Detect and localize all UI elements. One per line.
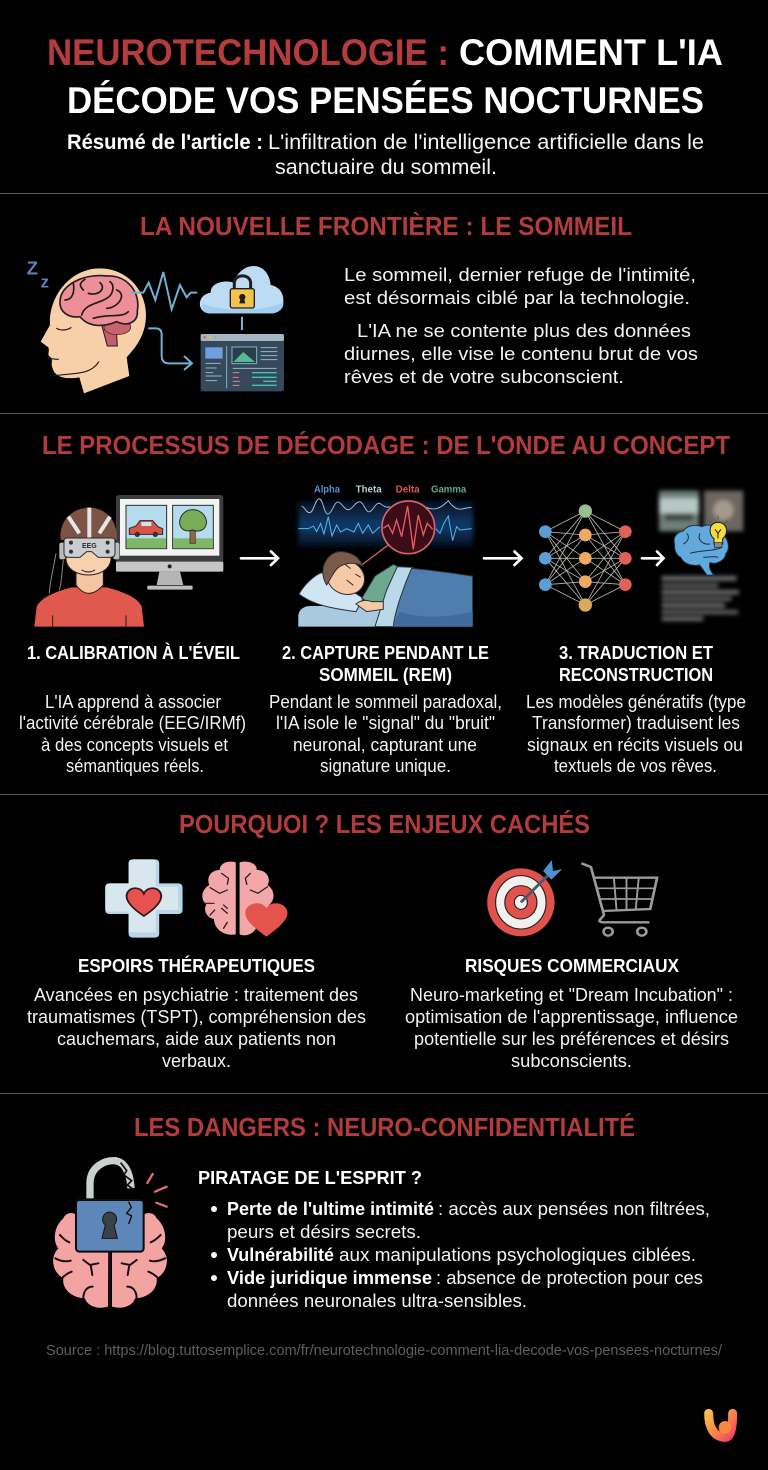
step 1: calibration xyxy=(19,642,246,776)
illustration: EEG calibration with monitor xyxy=(34,495,223,627)
step 1: calibration: sémantiques réels. xyxy=(66,756,204,776)
step 1: calibration: 1. CALIBRATION À L'ÉVEIL xyxy=(27,642,240,663)
arrow: step 1 to step 2 xyxy=(241,552,278,565)
illustration: reconstructed images, brain idea and blurred text xyxy=(659,491,743,621)
illustration: sleeper with brain wave capture: Alpha xyxy=(314,485,341,496)
source line: Source : https://blog.tuttosemplice.com/fr/neurotechnologie-comment-lia-decode-vos-pensees-nocturnes/ xyxy=(46,1343,723,1359)
step 2: capture during REM sleep: 2. CAPTURE PENDANT LE xyxy=(282,642,489,663)
icon: brain with cracked padlock xyxy=(53,1161,167,1308)
text: sleep as last refuge xyxy=(344,264,698,387)
text: sleep as last refuge: rêves et de votre subconscient. xyxy=(344,366,624,387)
step 1: calibration: à des concepts visuels et xyxy=(41,735,228,755)
panel: new frontier xyxy=(27,211,698,393)
bullet: legal void: Vide juridique immense xyxy=(227,1267,432,1288)
bullet: loss of ultimate intimacy: peurs et désirs secrets. xyxy=(227,1222,421,1242)
bullet: loss of ultimate intimacy: Perte de l'ultime intimité xyxy=(227,1198,434,1219)
icon: medical cross with heart xyxy=(105,859,183,938)
text: hacking the mind: PIRATAGE DE L'ESPRIT ? xyxy=(198,1167,422,1188)
step 3: translation and reconstruction: signaux en récits visuels ou xyxy=(527,735,743,755)
block: commercial risks: subconscients. xyxy=(511,1051,632,1071)
icon: target with arrow xyxy=(487,860,562,936)
step 2: capture during REM sleep: SOMMEIL (REM) xyxy=(319,664,452,685)
illustration: sleeping head, brain waves, cloud and data dashboard: z xyxy=(41,272,49,291)
block: therapeutic hopes xyxy=(27,955,366,1071)
step 3: translation and reconstruction: 3. TRADUCTION ET xyxy=(559,642,714,663)
icon: shopping cart xyxy=(581,863,657,936)
step 3: translation and reconstruction: textuels de vos rêves. xyxy=(554,756,717,776)
title: NEUROTECHNOLOGIE : xyxy=(47,32,449,73)
arrow: network to reconstruction xyxy=(642,552,664,565)
article summary: sanctuaire du sommeil. xyxy=(275,156,497,179)
illustration: sleeping head, brain waves, cloud and data dashboard: Z xyxy=(27,257,38,278)
step 3: translation and reconstruction: Les modèles génératifs (type xyxy=(526,692,746,712)
title: DÉCODE VOS PENSÉES NOCTURNES xyxy=(67,80,704,121)
bullet: loss of ultimate intimacy: : accès aux pensées non filtrées, xyxy=(438,1199,710,1219)
heading: decoding process: LE PROCESSUS DE DÉCODAGE : DE L'ONDE AU CONCEPT xyxy=(42,430,730,460)
title: COMMENT L'IA xyxy=(459,32,723,73)
illustration: sleeping head, brain waves, cloud and data dashboard xyxy=(27,257,284,393)
text: sleep as last refuge: est désormais ciblé par la technologie. xyxy=(344,287,690,308)
illustration: EEG calibration with monitor: EEG xyxy=(82,543,97,550)
panel: dangers xyxy=(53,1112,710,1311)
illustration: sleeper with brain wave capture: Gamma xyxy=(431,485,467,496)
bullet: legal void: données neuronales ultra-sensibles. xyxy=(227,1291,527,1311)
text: sleep as last refuge: Le sommeil, dernier refuge de l'intimité, xyxy=(344,264,696,285)
block: commercial risks: potentielle sur les préférences et désirs xyxy=(414,1029,729,1049)
step 2: capture during REM sleep xyxy=(269,642,502,776)
heading: hidden stakes: POURQUOI ? LES ENJEUX CACHÉS xyxy=(179,809,590,839)
logo xyxy=(709,1413,733,1437)
block: therapeutic hopes: cauchemars, aide aux patients non xyxy=(57,1029,336,1049)
step 2: capture during REM sleep: neuronal, capturant une xyxy=(293,735,477,755)
arrow: step 2 to step 3 xyxy=(484,552,522,565)
text: hacking the mind xyxy=(198,1167,710,1311)
bullet: legal void: : absence de protection pour ces xyxy=(436,1268,703,1288)
article summary xyxy=(67,131,704,179)
text: sleep as last refuge: L'IA ne se contente plus des données xyxy=(357,320,691,341)
block: commercial risks: RISQUES COMMERCIAUX xyxy=(465,955,680,976)
block: commercial risks xyxy=(405,955,738,1071)
step 2: capture during REM sleep: Pendant le sommeil paradoxal, xyxy=(269,692,502,712)
illustration: sleeper with brain wave capture: Theta xyxy=(356,485,382,496)
bullet: legal void xyxy=(211,1267,703,1311)
step 1: calibration: l'activité cérébrale (EEG/IRMf) xyxy=(19,713,246,733)
block: therapeutic hopes: ESPOIRS THÉRAPEUTIQUES xyxy=(78,955,315,976)
block: therapeutic hopes: Avancées en psychiatrie : traitement des xyxy=(34,985,358,1005)
text: sleep as last refuge: diurnes, elle vise le contenu brut de vos xyxy=(344,343,698,364)
step 3: translation and reconstruction: Transformer) traduisent les xyxy=(532,713,740,733)
panel: hidden stakes xyxy=(27,809,738,1071)
bullet: vulnerability xyxy=(211,1244,696,1265)
title xyxy=(47,32,723,121)
illustration: sleeper with brain wave capture: Delta xyxy=(396,485,420,496)
icon: brain with heart xyxy=(202,862,287,937)
bullet: vulnerability: Vulnérabilité xyxy=(227,1244,334,1265)
illustration: sleeper with brain wave capture xyxy=(298,485,473,627)
bullet: loss of ultimate intimacy xyxy=(211,1198,710,1242)
article summary: L'infiltration de l'intelligence artificielle dans le xyxy=(268,131,704,154)
block: therapeutic hopes: traumatismes (TSPT), compréhension des xyxy=(27,1007,366,1027)
step 3: translation and reconstruction xyxy=(526,642,746,776)
step 3: translation and reconstruction: RECONSTRUCTION xyxy=(559,664,713,685)
step 2: capture during REM sleep: l'IA isole le "signal" du "bruit" xyxy=(276,713,495,733)
block: commercial risks: optimisation de l'apprentissage, influence xyxy=(405,1007,738,1027)
article summary: Résumé de l'article : xyxy=(67,131,263,154)
illustration: neural network xyxy=(539,504,632,612)
header xyxy=(47,32,723,179)
step 1: calibration: L'IA apprend à associer xyxy=(45,692,221,712)
block: commercial risks: Neuro-marketing et "Dream Incubation" : xyxy=(410,985,733,1005)
bullet: vulnerability: aux manipulations psychologiques ciblées. xyxy=(339,1245,696,1265)
step 2: capture during REM sleep: signature unique. xyxy=(320,756,451,776)
block: therapeutic hopes: verbaux. xyxy=(162,1051,231,1071)
heading: dangers: LES DANGERS : NEURO-CONFIDENTIALITÉ xyxy=(134,1112,635,1142)
panel: decoding process xyxy=(19,430,746,776)
heading: new frontier: LA NOUVELLE FRONTIÈRE : LE SOMMEIL xyxy=(140,211,632,241)
